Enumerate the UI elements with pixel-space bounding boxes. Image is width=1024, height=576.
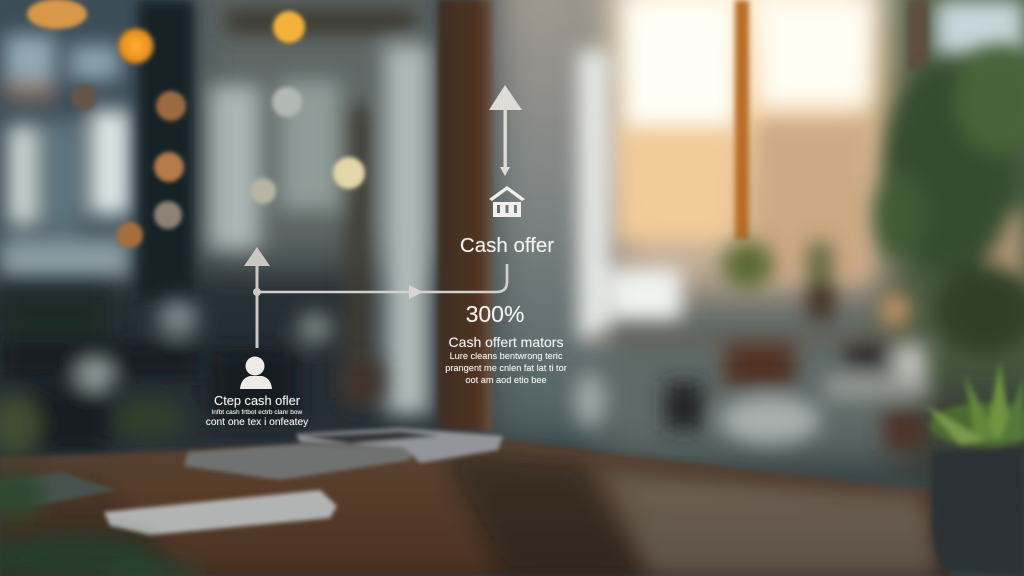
wooden table: [0, 437, 950, 576]
arrow: upward above house: [489, 85, 522, 176]
arrow: upward from person: [244, 247, 270, 348]
text block: cash offer matters: oot am aod etio bee: [465, 375, 547, 385]
windows left and centre: [0, 0, 1024, 415]
icon: person: [240, 356, 272, 389]
icon: house: [489, 186, 525, 217]
arrow: horizontal connector to cash offer: [253, 264, 507, 299]
text block: cash offer matters: Cash offert mators: [449, 334, 563, 350]
bokeh lights: [27, 0, 365, 248]
table wood grain and sheen: [100, 450, 940, 576]
potted plant on the right: [932, 448, 1024, 576]
text block: cash offer matters: prangent me cnlen fat lat ti tor: [445, 363, 567, 373]
dark column left: [138, 0, 194, 300]
text block: cash offer matters: Lure cleans bentwrong teric: [450, 351, 562, 361]
stat: 300%: 300%: [466, 301, 524, 327]
text block: step cash offer: lnfbt cash frtbot ectrb clanr bow: [212, 409, 302, 416]
text block: step cash offer: Ctep cash ofler: [214, 393, 300, 408]
plant leaves in pot: [925, 362, 1024, 447]
text block: step cash offer: cont one tex i onfeatey: [206, 417, 308, 428]
text block: cash offer matters: [445, 334, 567, 385]
text block: step cash offer: [206, 393, 308, 428]
foreground leaves bottom left: [0, 471, 200, 576]
notebooks and pen on table: [0, 428, 503, 535]
label: cash offer: Cash offer: [460, 234, 554, 257]
pillar and posts: [438, 0, 928, 430]
foliage and furniture: [0, 45, 1024, 455]
